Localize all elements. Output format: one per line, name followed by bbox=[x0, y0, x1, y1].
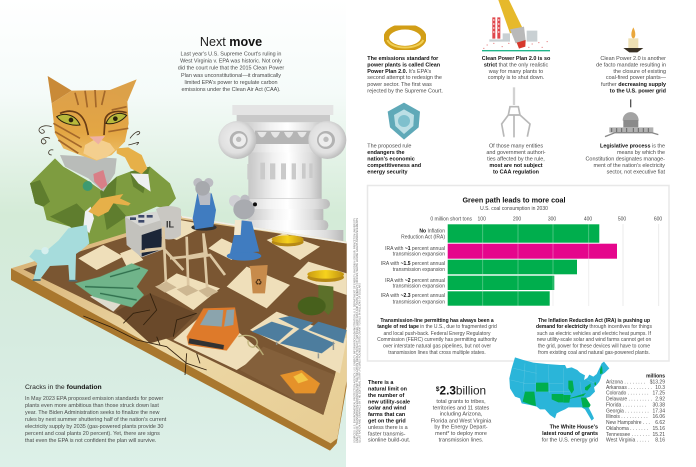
tie bbox=[93, 170, 107, 189]
recycling bin bbox=[249, 265, 268, 293]
text block: Inflation Reduction Act demand: new utility-scale solar and wind farms cannot get on bbox=[537, 337, 651, 343]
text block: not subject to CAA: ties affected by the rule, bbox=[487, 156, 545, 162]
map: U.S. grant states bbox=[509, 357, 609, 421]
Illinois bbox=[568, 381, 574, 394]
text block: foundation story bbox=[25, 396, 167, 444]
table: grants by state: Colorado . . . . . . . . bbox=[606, 391, 649, 397]
head bbox=[52, 90, 129, 161]
map caption: The White House's bbox=[550, 425, 598, 431]
left ear bbox=[48, 76, 72, 103]
mouse piece: front bbox=[227, 195, 261, 261]
table: grants by state: Illinois . . . . . . . . . . bbox=[606, 414, 648, 420]
text block: transmission-line permitting: tangle of red tape in the U.S., due to fragmented grid bbox=[377, 324, 497, 330]
chart row labels: No Inflation bbox=[419, 229, 445, 235]
text block: legislative process: sector, not executive fiat bbox=[607, 170, 665, 176]
text block: endangers bbox=[367, 144, 421, 176]
text block: Inflation Reduction Act demand: the grid, power for these devices will have to come bbox=[538, 344, 650, 350]
text block: grants: Florida and West Virginia bbox=[431, 418, 492, 424]
text block: not subject to CAA: to CAA regulation bbox=[493, 170, 539, 176]
table: grants by state: Georgia . . . . . . . . . bbox=[606, 408, 649, 414]
text block: endangers: competitiveness and bbox=[367, 163, 421, 169]
text block: emissions standard: Power Plan 2.0. It's EPA's bbox=[367, 69, 432, 75]
green barrels bbox=[298, 285, 333, 315]
text block: de facto mandate: de facto mandate resulting in bbox=[596, 62, 666, 68]
heading: Cracks in the foundation: Cracks in the foundation bbox=[25, 384, 102, 391]
text block: transmission-line permitting: over interstate natural gas pipelines, but not over bbox=[383, 344, 491, 350]
table: grants by state: West Virginia . . . . . bbox=[606, 438, 649, 444]
chart row labels bbox=[381, 229, 445, 306]
text block: de facto mandate bbox=[596, 56, 667, 94]
text block: intro: emissions under the Clean Air Act (CAA). bbox=[181, 87, 281, 93]
solar panels bbox=[252, 316, 347, 358]
Arizona bbox=[523, 392, 536, 406]
text block: natural limit: the number of bbox=[368, 393, 404, 399]
Delaware bbox=[594, 382, 596, 385]
text block: foundation story: electricity supply by 2035 (gas-powered plants provide 30 bbox=[25, 424, 163, 430]
text block: foundation story: year. The Biden Administration seeks to finalize the new bbox=[25, 410, 159, 416]
right brown square bbox=[240, 347, 335, 415]
text block: legislative process: Constitution designates manage- bbox=[586, 156, 665, 162]
muzzle bbox=[83, 138, 115, 160]
text block: natural limit: sionline build-out. bbox=[368, 438, 411, 444]
chart title: Green path leads to more coal bbox=[462, 196, 566, 204]
chart axis labels bbox=[430, 217, 662, 223]
table: grants by state: 6.62 bbox=[655, 420, 665, 426]
table: grants by state: Florida . . . . . . . . . bbox=[606, 402, 646, 408]
frame top bbox=[11, 216, 347, 443]
chart axis labels: 400 bbox=[584, 217, 592, 223]
map caption: for the U.S. energy grid bbox=[542, 438, 598, 444]
table: grants by state: $13.29 bbox=[650, 379, 665, 385]
source credits: ILLUSTRATION AND GRAPHICS BY THE EDITORIAL STAFF; FIGURES ROUNDED; STATE GRANT TOTALS IN MILLIONS OF DOLLARS bbox=[358, 283, 362, 443]
text block: intro: Plan was unconstitutional—it dramatically bbox=[181, 73, 281, 79]
whisker curls bbox=[39, 126, 140, 155]
Arkansas bbox=[563, 395, 571, 403]
table: grants by state: 10.3 bbox=[655, 385, 665, 391]
text block: transmission-line permitting: Commission (FERC) currently has permitting authority bbox=[377, 337, 497, 343]
text block: Inflation Reduction Act demand bbox=[536, 318, 652, 356]
text block: transmission-line permitting: and local push-back. Federal Energy Regulatory bbox=[383, 331, 491, 337]
text block: natural limit: get on the grid bbox=[368, 418, 406, 424]
panel: left illustration background bbox=[0, 0, 346, 467]
text block: emissions standard: power plants is called Clean bbox=[367, 62, 440, 68]
right ear bbox=[108, 79, 137, 102]
map caption bbox=[542, 425, 598, 444]
upper cuff bbox=[131, 173, 151, 192]
table: grants by state: Delaware . . . . . . . . . bbox=[606, 396, 652, 402]
text block: too strict: comply is to shut down. bbox=[488, 75, 545, 81]
source credits: ANALYSIS OF TRANSMISSION EXPANSION AND THE INFLATION REDUCTION ACT; NATIONAL GRID DATA AND STATE ENERGY OFFICES; WHITE HOUSE GRANT ANNOUNCEMENTS bbox=[355, 218, 359, 443]
bar chart bbox=[448, 224, 659, 306]
icon: U.S. Capitol bbox=[605, 99, 658, 137]
pointing hand bbox=[88, 194, 131, 217]
stat: 2.3 billion: billion bbox=[456, 384, 486, 398]
cream squares bbox=[78, 220, 347, 373]
pale cracked square bbox=[90, 288, 123, 312]
board surface bbox=[23, 219, 347, 415]
text block: foundation story: In May 2023 EPA proposed emission standards for power bbox=[25, 396, 164, 402]
chart row labels: transmission expansion bbox=[393, 252, 445, 258]
text block: not subject to CAA: Of those many entities bbox=[489, 144, 543, 150]
text block: Inflation Reduction Act demand: demand for electricity through incentives for things bbox=[536, 324, 652, 330]
text block: de facto mandate: the closure of existing bbox=[613, 69, 666, 75]
text block: foundation story: percent and coal plants 20 percent). Yet, there are signs bbox=[25, 431, 160, 437]
chart row labels: IRA with ~1.5 percent annual bbox=[381, 261, 445, 267]
lower cuff bbox=[83, 207, 94, 233]
illustration: chessboard frame bbox=[11, 216, 347, 451]
table: grants by state: Oklahoma . . . . . . . bbox=[606, 426, 648, 432]
New Hampshire bbox=[600, 365, 603, 374]
text block: emissions standard: The emissions standard for bbox=[367, 56, 439, 62]
chart axis labels: 300 bbox=[548, 217, 556, 223]
table: grants by state: millions bbox=[646, 373, 665, 379]
icon: candle bbox=[623, 27, 643, 52]
chart axis labels: 600 bbox=[654, 217, 662, 223]
text block: grants: transmission lines. bbox=[439, 438, 484, 444]
gold coin two bbox=[307, 270, 344, 282]
stat: 2.3 billion: $ bbox=[436, 386, 440, 393]
brow shadow bbox=[60, 111, 127, 135]
text block: transmission-line permitting: transmission lines that cross multiple states. bbox=[388, 350, 486, 356]
chart row labels: Reduction Act (IRA) bbox=[401, 235, 445, 241]
darker squares bbox=[115, 293, 197, 343]
text block: intro: limited EPA's power to regulate carbon bbox=[184, 80, 278, 86]
text block: de facto mandate: further decreasing supply bbox=[601, 82, 666, 88]
tabby stripes bbox=[53, 90, 128, 153]
text block: natural limit: natural limit on bbox=[368, 386, 407, 392]
chart subtitle: U.S. coal consumption in 2030 bbox=[480, 206, 548, 212]
table: grants by state: Arkansas . . . . . . . . . bbox=[606, 385, 652, 391]
text block: not subject to CAA: and government authori- bbox=[486, 150, 546, 156]
text block: foundation story: rules by next summer shuttering half of the nation's current bbox=[25, 417, 167, 423]
chart row labels: transmission expansion bbox=[393, 284, 445, 290]
text block: grants bbox=[431, 399, 492, 444]
Georgia bbox=[581, 398, 591, 407]
text block: endangers: nation's economic bbox=[367, 156, 415, 162]
icon: mechanical claw bbox=[502, 87, 530, 137]
text block: endangers: The proposed rule bbox=[367, 144, 411, 150]
table: grants by state: 16.06 bbox=[652, 414, 665, 420]
text block: too strict: Clean Power Plan 2.0 is so bbox=[482, 56, 551, 62]
text block: transmission-line permitting: Transmission-line permitting has always been a bbox=[380, 318, 494, 324]
text block: de facto mandate: Clean Power 2.0 is another bbox=[600, 56, 666, 62]
title: Next move: Next move bbox=[200, 35, 262, 49]
text block: natural limit: solar and wind bbox=[368, 406, 406, 412]
source credits bbox=[352, 218, 362, 443]
icon: shield bbox=[388, 103, 420, 140]
text block: de facto mandate: coal-fired power plants— bbox=[606, 75, 667, 81]
text block: natural limit: There is a bbox=[368, 380, 394, 386]
West Virginia bbox=[585, 383, 591, 391]
text block: emissions standard: rejected by the Supreme Court. bbox=[367, 88, 443, 94]
shirt and vest bbox=[60, 155, 117, 192]
chart row labels: IRA with ~2.3 percent annual bbox=[381, 293, 445, 299]
chart row labels: transmission expansion bbox=[393, 300, 445, 306]
text block: intro: Last year's U.S. Supreme Court's ruling in bbox=[181, 52, 281, 58]
money pile bbox=[75, 263, 148, 307]
text block: too strict bbox=[482, 56, 551, 81]
table: grants by state: 15.16 bbox=[652, 426, 665, 432]
table: grants by state: 30.38 bbox=[652, 402, 665, 408]
text block: intro bbox=[178, 52, 284, 93]
illustration: blue pony bbox=[29, 225, 89, 281]
text block: endangers: energy security bbox=[367, 170, 408, 176]
frame lip bbox=[11, 268, 347, 451]
mouse piece: back bbox=[191, 178, 217, 231]
text block: legislative process: means by which the bbox=[617, 150, 665, 156]
text block: natural limit bbox=[368, 380, 411, 444]
chart row labels: transmission expansion bbox=[393, 267, 445, 273]
jacket shading bbox=[30, 167, 150, 237]
oil drum: IL bbox=[166, 219, 175, 229]
table: grants by state: Tennessee . . . . . . . bbox=[606, 432, 650, 438]
chart axis labels: 100 bbox=[478, 217, 486, 223]
raised hand bbox=[117, 147, 147, 174]
text block: foundation story: that even the EPA is not confident the plan will survive. bbox=[25, 438, 157, 444]
Colorado bbox=[536, 383, 548, 392]
text block: intro: did the court rule that the 2015 Clean Power bbox=[178, 66, 284, 72]
illustration: cat in green suit bbox=[30, 76, 176, 247]
chart axis labels: 0 million short tons bbox=[430, 217, 472, 223]
stove bbox=[125, 212, 162, 257]
chart axis labels: 500 bbox=[618, 217, 626, 223]
text block: natural limit: faster transmis- bbox=[368, 431, 406, 437]
text block: intro: West Virginia v. EPA was historic. Not only bbox=[180, 59, 282, 65]
text block: Inflation Reduction Act demand: The Inflation Reduction Act (IRA) is pushing up bbox=[538, 318, 650, 324]
map caption: latest round of grants bbox=[542, 431, 598, 437]
text block: natural limit: farms that can bbox=[368, 412, 405, 418]
text block: legislative process bbox=[586, 144, 665, 176]
source credits: SOURCES: U.S. ENVIRONMENTAL PROTECTION AGENCY; U.S. ENERGY INFORMATION ADMINISTRATION; U.S. DEPARTMENT OF ENERGY; RHODIUM GROUP; PRINCETON UNIVERSITY bbox=[352, 218, 356, 443]
illustration: board pieces bbox=[75, 178, 347, 393]
table: grants by state: 2.92 bbox=[655, 396, 665, 402]
cracks bbox=[83, 293, 207, 375]
text block: emissions standard: second attempt to redesign the bbox=[367, 75, 442, 81]
text block: natural limit: unless there is a bbox=[368, 425, 409, 431]
chart row labels: IRA with ~1 percent annual bbox=[385, 246, 445, 252]
text block: Inflation Reduction Act demand: from existing coal and natural gas-powered plants. bbox=[538, 350, 650, 356]
text block: not subject to CAA: most are not subject bbox=[489, 163, 543, 169]
wind turbines bbox=[140, 227, 225, 292]
text block: emissions standard: power sector. The first was bbox=[367, 82, 432, 88]
icon: gold ring bbox=[386, 27, 424, 49]
electric car bbox=[187, 307, 263, 355]
text block: legislative process: Legislative process is the bbox=[600, 144, 665, 150]
eyes bbox=[57, 114, 80, 125]
text block: Inflation Reduction Act demand: such as electric vehicles and electric heat pumps. If bbox=[537, 331, 652, 337]
text block: grants: ment* to deploy more bbox=[435, 431, 487, 437]
table: grants by state: Arizona . . . . . . . . bbox=[606, 379, 645, 385]
text block: too strict: strict that the only realistic bbox=[484, 62, 548, 68]
back edge bbox=[182, 217, 347, 243]
panel: coal chart bbox=[368, 186, 669, 361]
oil drum bbox=[156, 206, 181, 239]
text block: endangers: endangers the bbox=[367, 150, 404, 156]
table: grants by state: 17.25 bbox=[652, 391, 665, 397]
text block: too strict: way for many plants to bbox=[488, 69, 543, 75]
chart row labels: IRA with ~2 percent annual bbox=[385, 278, 445, 284]
table: grants by state: 17.34 bbox=[652, 408, 665, 414]
stat: 2.3 billion: 2.3 bbox=[440, 384, 456, 398]
illustration: ionic column bbox=[218, 105, 346, 243]
Oklahoma bbox=[552, 394, 563, 402]
chart axis labels: 200 bbox=[513, 217, 521, 223]
turbine bases bbox=[155, 282, 218, 297]
text block: grants: total grants to tribes, bbox=[436, 399, 486, 405]
table: grants by state: New Hampshire . . . bbox=[606, 420, 650, 426]
text block: not subject to CAA bbox=[486, 144, 546, 176]
table: grants by state: 8.16 bbox=[655, 438, 665, 444]
Tennessee bbox=[568, 393, 586, 399]
lapel pin bbox=[83, 181, 93, 191]
text block: grants: including Arizona, bbox=[440, 412, 483, 418]
recycling bin: ♻ bbox=[255, 277, 263, 287]
icon: pencil erasing power plant bbox=[482, 0, 550, 51]
text block: natural limit: new utility-scale bbox=[368, 399, 410, 405]
nose bbox=[89, 136, 105, 144]
text block: legislative process: ment of the nation's electricity bbox=[594, 163, 665, 169]
jacket bbox=[30, 158, 176, 247]
text block: de facto mandate: to the U.S. power grid bbox=[610, 88, 666, 94]
table: grants by state: 15.21 bbox=[652, 432, 665, 438]
table: grants by state bbox=[606, 373, 665, 444]
text block: emissions standard bbox=[367, 56, 443, 94]
mouse trap bbox=[280, 370, 320, 393]
text block: grants: by the Energy Depart- bbox=[434, 425, 488, 431]
text block: transmission-line permitting bbox=[377, 318, 497, 356]
text block: foundation story: plants even more ambitious than those struck down last bbox=[25, 403, 159, 409]
text block: grants: territories and 11 states bbox=[433, 405, 489, 411]
gold coin one bbox=[272, 235, 304, 246]
